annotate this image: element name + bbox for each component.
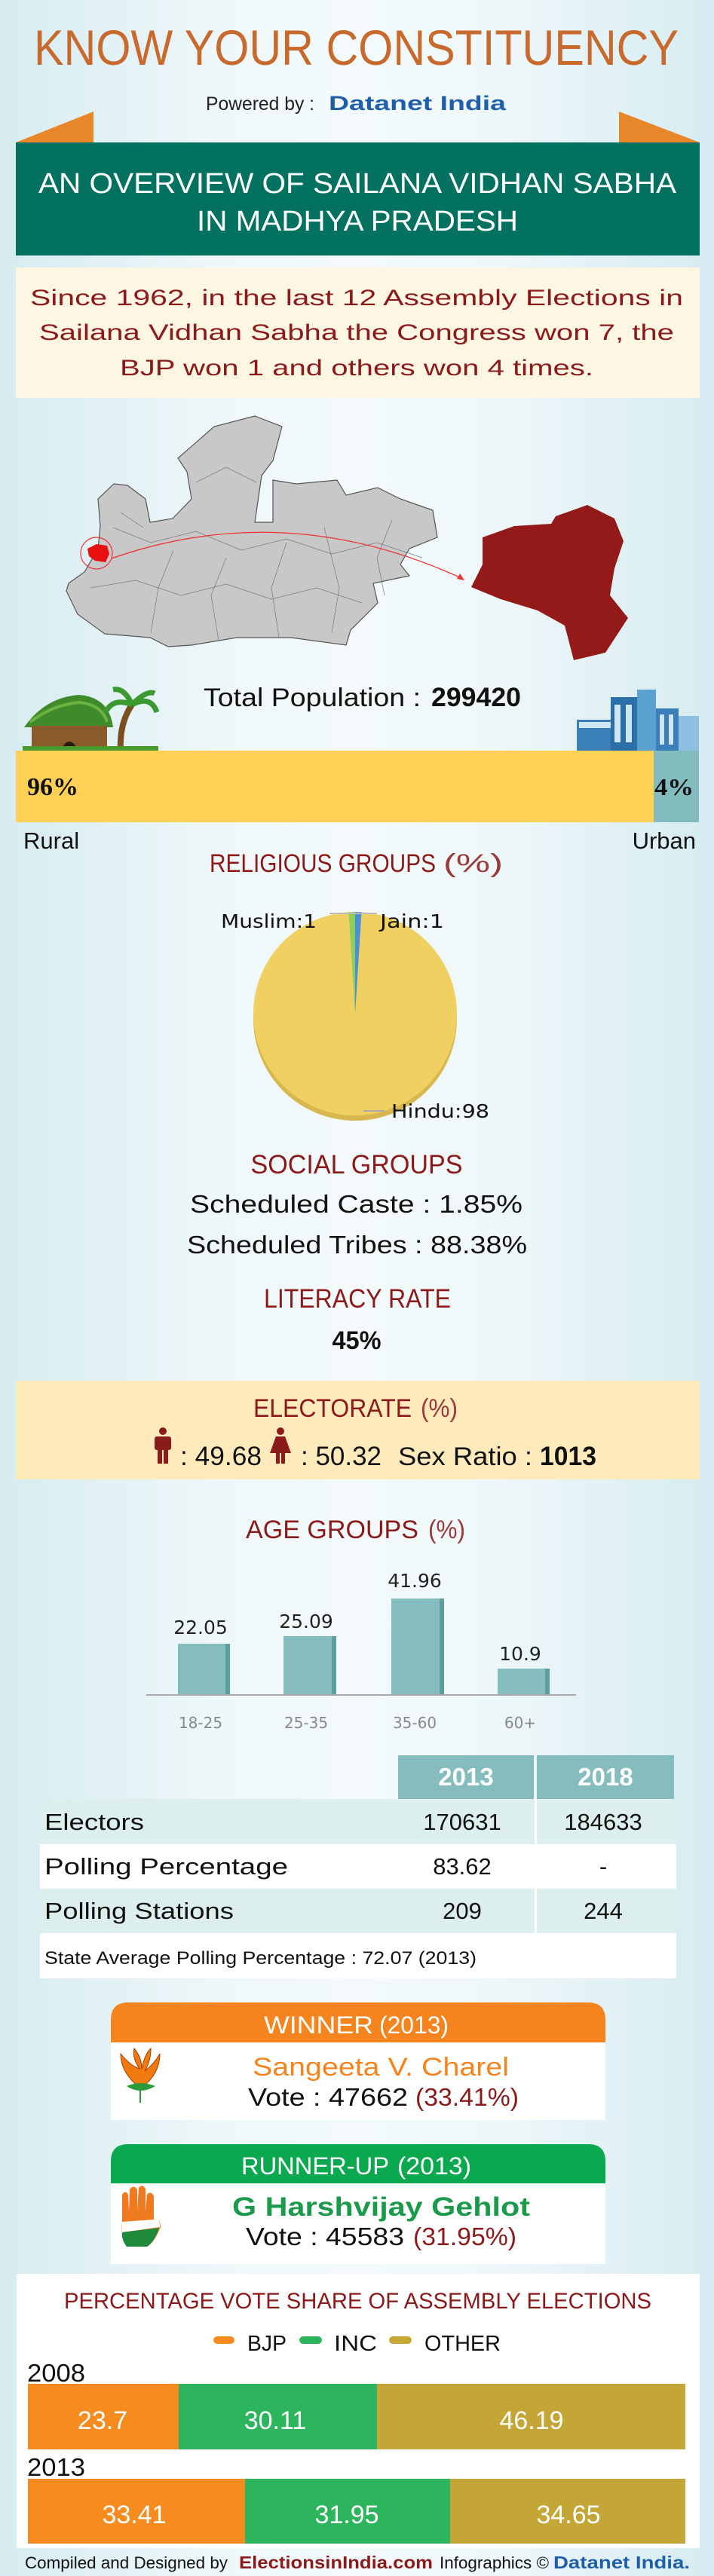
bar chart: age groups: 35-60 [393, 1714, 437, 1732]
legend: OTHER [424, 2332, 501, 2356]
table: electors: 2013 [438, 1763, 494, 1791]
footer credits: Infographics © [440, 2553, 549, 2572]
summary box: Since 1962, in the last 12 Assembly Elections in [30, 286, 683, 311]
social groups values: Scheduled Tribes : 88.38% [187, 1231, 527, 1259]
table: electors: State Average Polling Percentage : 72.07 (2013) [44, 1948, 477, 1969]
powered by line: Powered by : [206, 93, 314, 115]
bar chart: age groups: 10.9 [499, 1643, 541, 1665]
bar: 2008: 23.7 [78, 2406, 127, 2435]
map: Madhya Pradesh [66, 416, 464, 647]
labels rural urban: Rural [23, 828, 79, 854]
panel: vote share: PERCENTAGE VOTE SHARE OF ASSEMBLY ELECTIONS [64, 2289, 651, 2314]
icon: rural hut [23, 690, 158, 751]
card: runner-up: (31.95%) [413, 2223, 516, 2250]
panel: electorate: : 49.68 [180, 1442, 262, 1471]
card: winner: Vote : 47662 [248, 2083, 408, 2111]
table: electors: 83.62 [433, 1853, 492, 1880]
card: runner-up: (2013) [397, 2152, 471, 2180]
icon: Congress hand [122, 2186, 161, 2247]
pie chart: religion: Muslim:1 [221, 910, 317, 932]
bar chart: age groups: 25-35 [284, 1714, 328, 1732]
icon: urban buildings [577, 690, 699, 751]
bar chart: age groups: 60+ [504, 1714, 536, 1732]
card: winner [111, 2002, 605, 2120]
table: electors: 170631 [423, 1809, 501, 1835]
bar: 2013 [27, 2453, 685, 2544]
banner: overview heading [16, 142, 700, 255]
bar: 2013: 2013 [27, 2453, 85, 2481]
heading: literacy rate: LITERACY RATE [264, 1284, 451, 1314]
labels rural urban [23, 828, 696, 854]
card: winner: (2013) [379, 2012, 449, 2039]
legend: BJP [247, 2332, 287, 2356]
bar: 2013: 31.95 [314, 2501, 379, 2529]
panel: electorate [16, 1381, 700, 1479]
total population: 299420 [431, 683, 521, 712]
powered by line [206, 92, 507, 115]
summary box: BJP won 1 and others won 4 times. [120, 356, 593, 381]
icon: male [155, 1427, 171, 1464]
total population: Total Population : [204, 684, 421, 712]
table: electors: 209 [443, 1898, 482, 1924]
summary box: Sailana Vidhan Sabha the Congress won 7, the [39, 320, 674, 345]
table: electors: 244 [584, 1898, 623, 1924]
card: runner-up [111, 2144, 605, 2264]
table: electors: Polling Stations [44, 1898, 234, 1924]
table: electors: - [599, 1853, 607, 1880]
labels rural urban: Urban [633, 828, 696, 854]
legend [213, 2332, 501, 2356]
panel: electorate: 1013 [540, 1442, 596, 1471]
bar chart: age groups: 41.96 [388, 1570, 442, 1592]
heading: social groups: SOCIAL GROUPS [250, 1150, 463, 1179]
card: winner: WINNER [264, 2012, 373, 2039]
heading: religious groups: RELIGIOUS GROUPS [210, 849, 436, 878]
footer credits: Datanet India. [553, 2553, 690, 2572]
bar chart: age groups: 18-25 [179, 1714, 222, 1732]
legend: INC [334, 2332, 377, 2356]
summary box [16, 268, 700, 398]
card: winner: (33.41%) [415, 2083, 519, 2111]
table: electors [40, 1755, 676, 1978]
social groups values: Scheduled Caste : 1.85% [190, 1190, 522, 1218]
district shape [471, 505, 628, 660]
icon: female [270, 1427, 291, 1464]
table: electors: 2018 [578, 1763, 633, 1791]
footer credits [25, 2553, 690, 2572]
footer credits: Compiled and Designed by [25, 2553, 228, 2572]
bar: 2008 [27, 2359, 685, 2449]
card: runner-up: Vote : 45583 [246, 2223, 404, 2250]
panel: vote share [17, 2274, 700, 2548]
ribbon folds [16, 112, 700, 142]
panel: electorate: : 50.32 [301, 1442, 382, 1471]
bar: 2008: 2008 [27, 2359, 85, 2387]
heading: religious groups: (%) [443, 849, 503, 878]
bar chart: age groups: 25.09 [279, 1611, 333, 1632]
highlighted district [87, 544, 109, 562]
bar: 2013: 34.65 [536, 2501, 601, 2529]
bar: 2013: 33.41 [102, 2501, 167, 2529]
bar chart: age groups [146, 1570, 576, 1732]
card: runner-up: RUNNER-UP [241, 2152, 389, 2180]
social groups values [187, 1190, 527, 1259]
rural urban bar: 96% [27, 773, 78, 801]
rural urban bar [16, 751, 699, 822]
pie chart: religion: Jain:1 [378, 910, 444, 932]
powered by line: Datanet India [329, 92, 507, 115]
table: electors: Electors [44, 1809, 144, 1835]
rural urban bar: 4% [654, 773, 694, 800]
table: electors: 184633 [564, 1809, 642, 1835]
bar: 2008: 46.19 [499, 2406, 564, 2435]
arrow [112, 532, 463, 579]
pie chart: religion: Hindu:98 [391, 1100, 489, 1122]
heading: age groups: (%) [428, 1516, 465, 1544]
bar: 2008: 30.11 [244, 2406, 306, 2435]
panel: electorate: Sex Ratio : [398, 1442, 532, 1471]
table: electors: Polling Percentage [44, 1853, 288, 1880]
footer credits: ElectionsinIndia.com [239, 2553, 433, 2572]
panel: electorate: (%) [421, 1394, 458, 1423]
bar chart: age groups: 22.05 [173, 1617, 228, 1638]
banner: overview heading: AN OVERVIEW OF SAILANA VIDHAN SABHA [38, 168, 677, 200]
card: runner-up: G Harshvijay Gehlot [232, 2192, 530, 2222]
card: winner: Sangeeta V. Charel [253, 2053, 509, 2082]
total population [204, 683, 521, 712]
heading: age groups: AGE GROUPS [246, 1516, 418, 1544]
banner: overview heading: IN MADHYA PRADESH [197, 206, 518, 237]
literacy value: 45% [332, 1326, 382, 1355]
panel: electorate: ELECTORATE [253, 1394, 412, 1423]
pie chart: religion [221, 910, 489, 1122]
icon: BJP lotus [121, 2048, 160, 2103]
